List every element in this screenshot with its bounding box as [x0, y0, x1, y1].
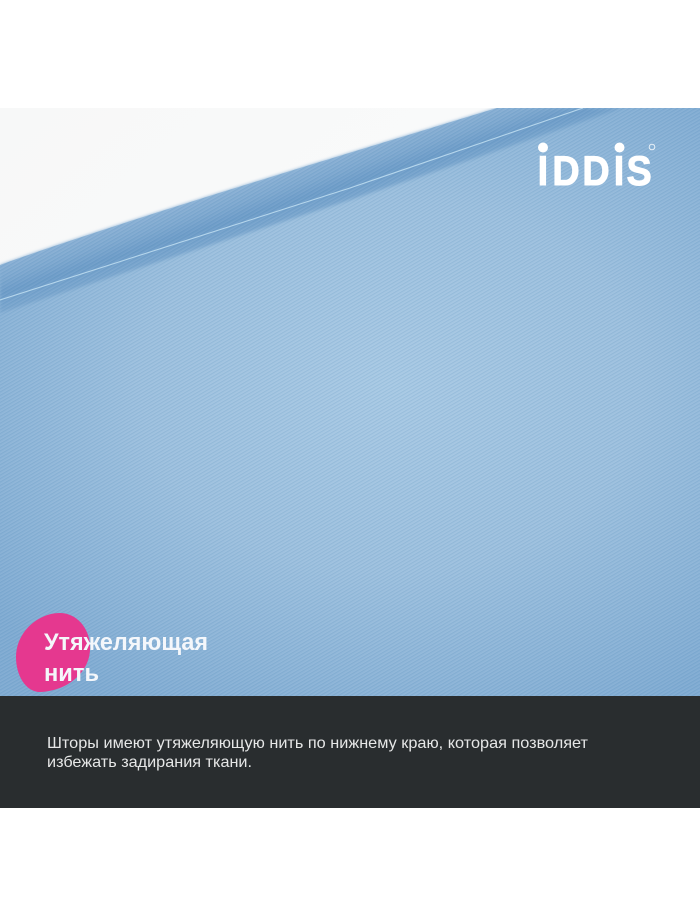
photo background	[0, 108, 700, 696]
photo: blue fabric curtain	[0, 108, 700, 696]
heading	[44, 629, 208, 687]
heading: Утяжеляющая	[44, 629, 208, 656]
pink blob accent	[16, 613, 90, 692]
weighted hem fold	[0, 108, 622, 313]
logo: IDDIS: IDDIS	[538, 148, 652, 194]
hem stitch line	[0, 108, 583, 300]
infographic canvas	[0, 108, 700, 808]
caption text: избежать задирания ткани.	[47, 754, 252, 771]
caption panel	[0, 696, 700, 808]
caption text: Шторы имеют утяжеляющую нить по нижнему краю, которая позволяет	[47, 735, 589, 752]
caption text	[47, 735, 589, 771]
heading: нить	[44, 660, 99, 687]
